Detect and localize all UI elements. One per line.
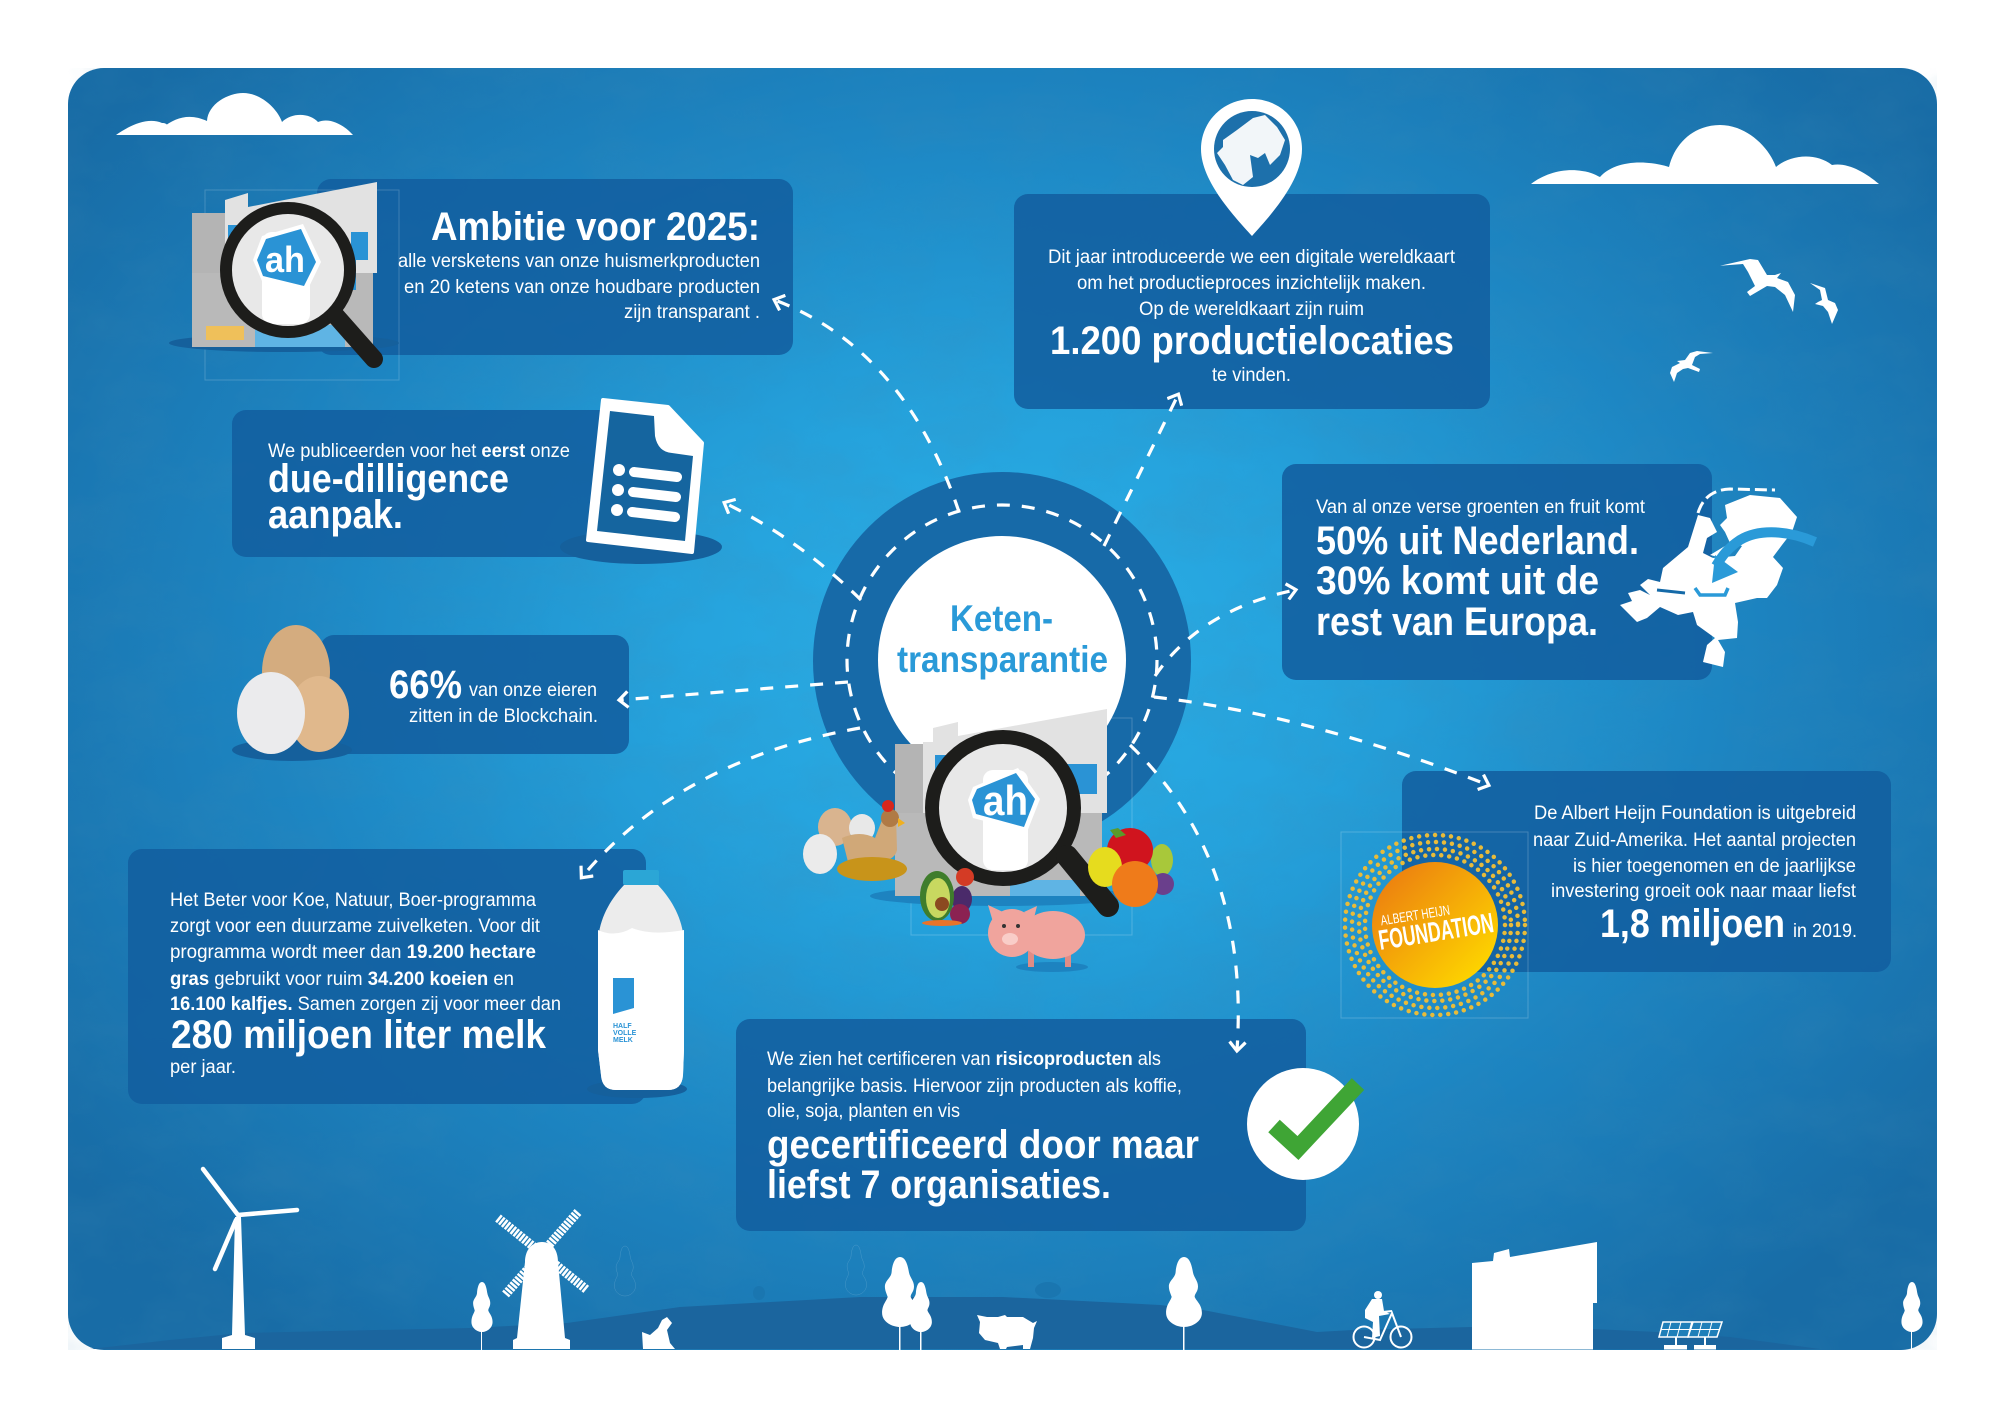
heading: due-dilligence aanpak — [268, 457, 509, 537]
heading: certification: gecertificeerd door maar — [767, 1123, 1199, 1167]
icon: milk bottle: MELK — [613, 1037, 633, 1044]
panel: due diligence — [232, 410, 666, 557]
icon: cloud right — [1531, 125, 1879, 184]
icon: solar panel — [1659, 1322, 1722, 1350]
text: world map intro — [1048, 247, 1456, 320]
icon: hen and eggs — [803, 800, 907, 881]
panel: foundation — [1402, 771, 1891, 972]
arrow: to Netherlands panel — [1155, 590, 1295, 676]
text: ambitie body — [398, 251, 760, 323]
heading: Netherlands percentages: 50% uit Nederland. — [1316, 519, 1639, 563]
panel: certification — [736, 1019, 1306, 1231]
landscape: faint background trees and animals — [614, 1245, 1061, 1300]
text: milk body: zorgt voor een duurzame zuivelketen. Voor dit — [170, 916, 541, 937]
arrow: to foundation panel — [1154, 697, 1488, 785]
heading: 1,8 miljoen: 1,8 miljoen — [1600, 902, 1785, 946]
icon: milk bottle — [587, 870, 687, 1098]
icon: wind turbine — [203, 1169, 297, 1349]
text: milk body: gras gebruikt voor ruim 34.200 koeien en — [170, 969, 514, 990]
heading: Ketentransparantie: Keten- — [950, 598, 1053, 639]
icon: cyclist — [1354, 1291, 1412, 1348]
text: certification body: We zien het certificeren van risicoproducten als — [767, 1049, 1161, 1070]
icon: trees — [471, 1257, 1923, 1350]
text: foundation body: naar Zuid-Amerika. Het aantal projecten — [1533, 830, 1856, 851]
icon: eggs — [232, 625, 352, 761]
icon: milk bottle: VOLLE — [613, 1030, 637, 1037]
panel: Netherlands sourcing — [1282, 464, 1712, 680]
heading: 280 miljoen liter melk: 280 miljoen liter melk — [171, 1013, 547, 1057]
text: 66 percent: van onze eieren — [469, 680, 597, 701]
heading: Ketentransparantie — [897, 598, 1108, 680]
icon: Albert Heijn Foundation logo — [1341, 832, 1528, 1018]
heading: ambitie: Ambitie voor 2025: — [431, 205, 760, 249]
text: world map intro: om het productieproces inzichtelijk maken. — [1077, 273, 1426, 294]
icon: fruit — [1088, 828, 1174, 907]
icon: milk bottle: HALF — [613, 1023, 632, 1030]
panel: milk programme — [128, 849, 646, 1104]
icon: central store with magnifying glass: ah — [983, 777, 1028, 824]
icon: map of the Netherlands — [1620, 489, 1815, 667]
text: per jaar: per jaar. — [170, 1057, 236, 1078]
arrow: to world map panel — [1104, 395, 1178, 546]
text: certification body: olie, soja, planten en vis — [767, 1101, 960, 1122]
dashed ring and white central circle — [813, 472, 1191, 850]
icon: cloud left — [116, 93, 353, 135]
text: certification body — [767, 1049, 1182, 1122]
arrow: to due-diligence panel — [725, 503, 861, 600]
icon: pig — [988, 905, 1088, 972]
heading: due-dilligence aanpak: due-dilligence — [268, 457, 509, 501]
heading: due-dilligence aanpak: aanpak. — [268, 493, 403, 537]
heading: Ketentransparantie: transparantie — [897, 639, 1108, 680]
heading: Netherlands percentages: 30% komt uit de — [1316, 559, 1599, 603]
text: te vinden: te vinden. — [1212, 365, 1291, 386]
icon: avocado and vegetables — [920, 868, 974, 926]
text: foundation body: investering groeit ook naar maar liefst — [1551, 881, 1857, 902]
icon: store under magnifying glass, small — [169, 182, 399, 380]
text: milk body: Het Beter voor Koe, Natuur, Boer-programma — [170, 890, 536, 911]
icon: check mark — [1247, 1068, 1359, 1180]
text: certification body: belangrijke basis. Hiervoor zijn producten als koffie, — [767, 1076, 1182, 1097]
icon: location pin with globe — [1201, 99, 1302, 236]
heading: certification — [767, 1123, 1199, 1207]
heading: Netherlands percentages: rest van Europa. — [1316, 600, 1598, 644]
text: 66 percent: 66% — [389, 663, 462, 707]
text: 66 percent: zitten in de Blockchain. — [409, 706, 598, 727]
panel: ambitie 2025 — [317, 179, 793, 355]
text: foundation body: is hier toegenomen en de jaarlijkse — [1573, 856, 1856, 877]
text: milk body — [170, 890, 561, 1015]
text: world map intro: Dit jaar introduceerde we een digitale wereldkaart — [1048, 247, 1456, 268]
arrow: to milk panel — [582, 728, 860, 877]
heading: certification: liefst 7 organisaties. — [767, 1163, 1111, 1207]
panel: eggs — [320, 635, 629, 754]
heading: 1,8 miljoen: in 2019. — [1793, 921, 1857, 942]
icon: factory building — [1472, 1242, 1597, 1350]
arrow: to ambitie panel — [775, 300, 959, 512]
icon: store under magnifying glass, small: ah — [265, 239, 305, 280]
text: foundation body — [1533, 803, 1857, 902]
heading: 1.200 productielocaties: 1.200 productielocaties — [1050, 319, 1454, 363]
icon: bird lower — [1670, 351, 1713, 382]
text: 66 percent — [389, 663, 598, 727]
icon: bird large — [1720, 259, 1795, 312]
icon: Albert Heijn Foundation logo: FOUNDATION — [1376, 907, 1496, 956]
text: milk body: programma wordt meer dan 19.200 hectare — [170, 942, 536, 963]
landscape: hills — [90, 1297, 1820, 1349]
text: due diligence intro: We publiceerden voor het eerst onze — [268, 441, 570, 462]
text: ambitie body: zijn transparant . — [624, 302, 760, 323]
icon: pig silhouette — [977, 1315, 1037, 1349]
icon: central store with magnifying glass — [870, 709, 1132, 935]
arrow: to certification panel — [1130, 745, 1238, 1050]
icon: bird small — [1810, 283, 1838, 324]
icon: Albert Heijn Foundation logo: ALBERT HEIJN — [1379, 902, 1451, 928]
text: ambitie body: en 20 ketens van onze houdbare producten — [404, 277, 760, 298]
text: foundation body: De Albert Heijn Foundation is uitgebreid — [1534, 803, 1856, 824]
icon: windmill — [498, 1212, 587, 1349]
text: world map intro: Op de wereldkaart zijn ruim — [1139, 299, 1364, 320]
icon: chicken silhouette — [642, 1317, 675, 1349]
arrow: to eggs panel — [620, 682, 848, 700]
icon: document — [560, 400, 722, 564]
panel: world map — [1014, 194, 1490, 409]
text: ambitie body: alle versketens van onze huismerkproducten — [398, 251, 760, 272]
text: milk body: 16.100 kalfjes. Samen zorgen zij voor meer dan — [170, 994, 561, 1015]
heading: Netherlands percentages — [1316, 519, 1639, 644]
text: Netherlands intro: Van al onze verse groenten en fruit komt — [1316, 497, 1646, 518]
